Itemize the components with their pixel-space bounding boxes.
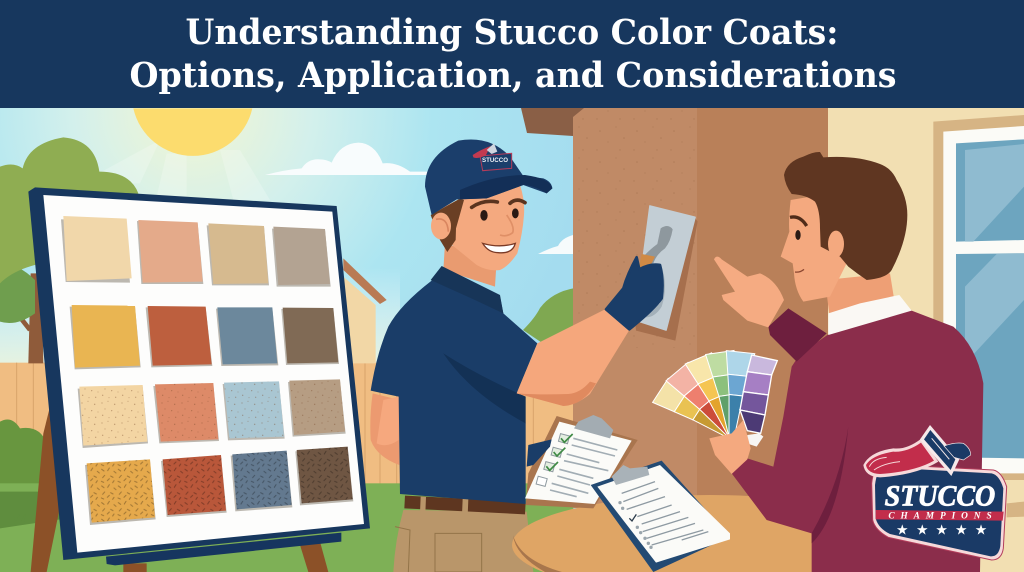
cap logo text: STUCCO (482, 157, 508, 164)
mouth (795, 269, 804, 272)
tree (0, 137, 138, 363)
easel legs (31, 400, 328, 572)
front arm (517, 309, 629, 406)
logo stars: ★ (935, 522, 948, 538)
trowel on wall (635, 206, 698, 341)
title line 2: Options, Application, and Considerations (130, 55, 896, 96)
face (432, 185, 524, 270)
trowel plate (635, 206, 695, 330)
text lines (622, 482, 708, 545)
window (933, 115, 1024, 517)
board frame (28, 187, 370, 560)
cloud (265, 143, 450, 175)
clipboard clip (574, 415, 613, 438)
bush (0, 419, 57, 492)
title banner (0, 0, 1024, 108)
holding hand (709, 420, 751, 474)
sun rays (80, 140, 270, 200)
logo stars: ★ (896, 522, 909, 538)
grass (0, 483, 573, 572)
roof eave (521, 108, 584, 136)
pointing hand (714, 257, 784, 327)
sample board (28, 187, 370, 565)
strip yellow (685, 353, 745, 442)
fence (0, 363, 573, 486)
row 4 coarse texture swatches (87, 447, 353, 523)
logo stars: ★ (955, 522, 968, 538)
cream house wall (828, 108, 1024, 572)
strip cream (653, 378, 739, 449)
sun (133, 108, 252, 156)
red banner (876, 510, 1004, 521)
hair (431, 199, 464, 252)
upper sleeve (768, 308, 827, 362)
worker (370, 139, 663, 572)
trowel handle (639, 226, 673, 263)
held clipboard (525, 415, 638, 508)
row 2 smooth deep swatches (72, 305, 338, 368)
neck (443, 243, 497, 287)
bush behind worker (523, 288, 575, 355)
cap brim (460, 175, 552, 199)
nose (500, 215, 513, 236)
brand logo (863, 425, 1007, 560)
logo trowel (920, 425, 971, 476)
neck (825, 273, 894, 320)
face (781, 195, 850, 302)
ribbon swoosh (863, 438, 938, 477)
glove (606, 257, 663, 329)
board white panel (43, 195, 364, 553)
glass reflection (965, 144, 1024, 363)
belt (404, 496, 526, 514)
stucco wall column (573, 108, 828, 508)
shirt fold (443, 353, 526, 423)
house (343, 258, 387, 363)
hair (784, 152, 907, 280)
window frame (933, 115, 1024, 480)
logo stars: ★ (975, 522, 987, 538)
strip blue (717, 351, 755, 438)
strip pink (666, 362, 743, 446)
trowel smear (642, 267, 665, 317)
background scene (0, 108, 573, 572)
clipboard clip (612, 465, 649, 485)
eyes (480, 210, 488, 221)
pants (393, 510, 533, 572)
board tray (106, 533, 341, 565)
clipboard paper (525, 422, 632, 504)
logo subtitle: CHAMPIONS (888, 512, 992, 522)
color fan deck (653, 350, 755, 449)
title line 1: Understanding Stucco Color Coats: (186, 12, 838, 53)
ear (431, 213, 451, 239)
badge outline (872, 464, 1007, 560)
cap logo (473, 143, 512, 171)
logo stars (896, 522, 987, 538)
trowel shadow on wall (635, 217, 698, 341)
clipboard frame (591, 461, 730, 572)
text lines (550, 438, 617, 497)
eyebrows (472, 200, 525, 207)
haze near horizon (0, 267, 400, 367)
window glass (956, 139, 1024, 242)
swatch shadows (61, 219, 353, 525)
smile (483, 243, 515, 253)
logo stars: ★ (916, 522, 929, 538)
ear (828, 231, 844, 257)
check marks (546, 434, 573, 470)
sweater fold (812, 427, 848, 543)
eye (795, 230, 801, 240)
clipboard backing (526, 416, 638, 508)
badge navy (875, 467, 1003, 556)
small cloud by wall (538, 235, 573, 254)
clipboard paper (597, 465, 730, 563)
banner background (0, 0, 1024, 108)
strip purple (747, 433, 763, 447)
shirt collar (431, 266, 503, 313)
check boxes (536, 434, 570, 486)
polo shirt (371, 267, 537, 504)
gloved hand (527, 439, 552, 467)
sweater body (732, 310, 983, 572)
eyebrow (790, 217, 807, 226)
row 3 fine texture swatches (79, 379, 345, 446)
table clipboard (591, 461, 730, 572)
window sill (1007, 502, 1024, 517)
table (512, 495, 908, 572)
shirt collar (828, 295, 912, 335)
customer (653, 152, 983, 572)
cap (425, 139, 552, 215)
row 1 smooth light swatches (63, 216, 330, 285)
rear arm (370, 393, 399, 465)
logo name: STUCCO (885, 480, 995, 512)
strip green (706, 350, 746, 439)
